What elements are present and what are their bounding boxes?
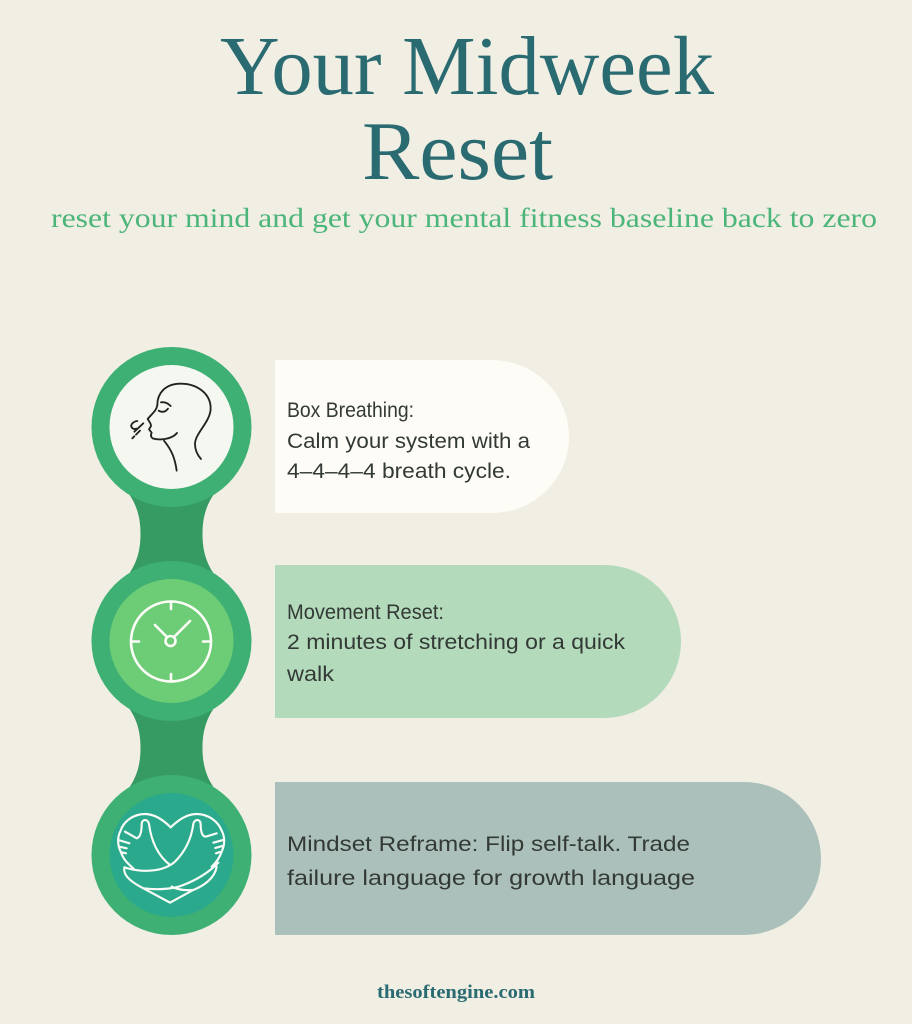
connector: top	[126, 490, 217, 578]
title: Reset	[362, 105, 553, 198]
panel: mindset reframe	[275, 782, 821, 935]
text: box breathing: Box Breathing:	[287, 399, 414, 422]
title	[220, 20, 714, 198]
footer: website: thesoftengine.com	[377, 982, 535, 1003]
step 3 icon: self-hug heart	[92, 775, 252, 935]
text: mindset reframe: Mindset Reframe: Flip self-talk. Trade	[287, 833, 690, 856]
text: box breathing: Calm your system with a	[287, 430, 530, 453]
icon: clock face	[131, 602, 211, 682]
icon: head profile breathing out	[131, 384, 211, 471]
panel: box breathing	[275, 360, 569, 513]
title: Your Midweek	[220, 20, 714, 113]
icon: arms hugging in heart shape	[118, 814, 224, 903]
subtitle: reset your mind and get your mental fitness baseline back to zero	[51, 203, 877, 233]
text: movement reset: Movement Reset:	[287, 601, 444, 624]
step 1 icon: breathing	[92, 347, 252, 507]
step 2 icon: clock	[92, 561, 252, 721]
text: movement reset: walk	[286, 663, 335, 686]
text: box breathing	[287, 399, 530, 483]
text: movement reset	[286, 601, 626, 686]
text: mindset reframe: failure language for growth language	[287, 867, 695, 890]
text: box breathing: 4–4–4–4 breath cycle.	[287, 460, 511, 483]
text: movement reset: 2 minutes of stretching or a quick	[287, 631, 626, 654]
panel: movement reset	[275, 565, 681, 718]
connector: bottom	[126, 704, 217, 792]
text: mindset reframe	[287, 833, 695, 890]
